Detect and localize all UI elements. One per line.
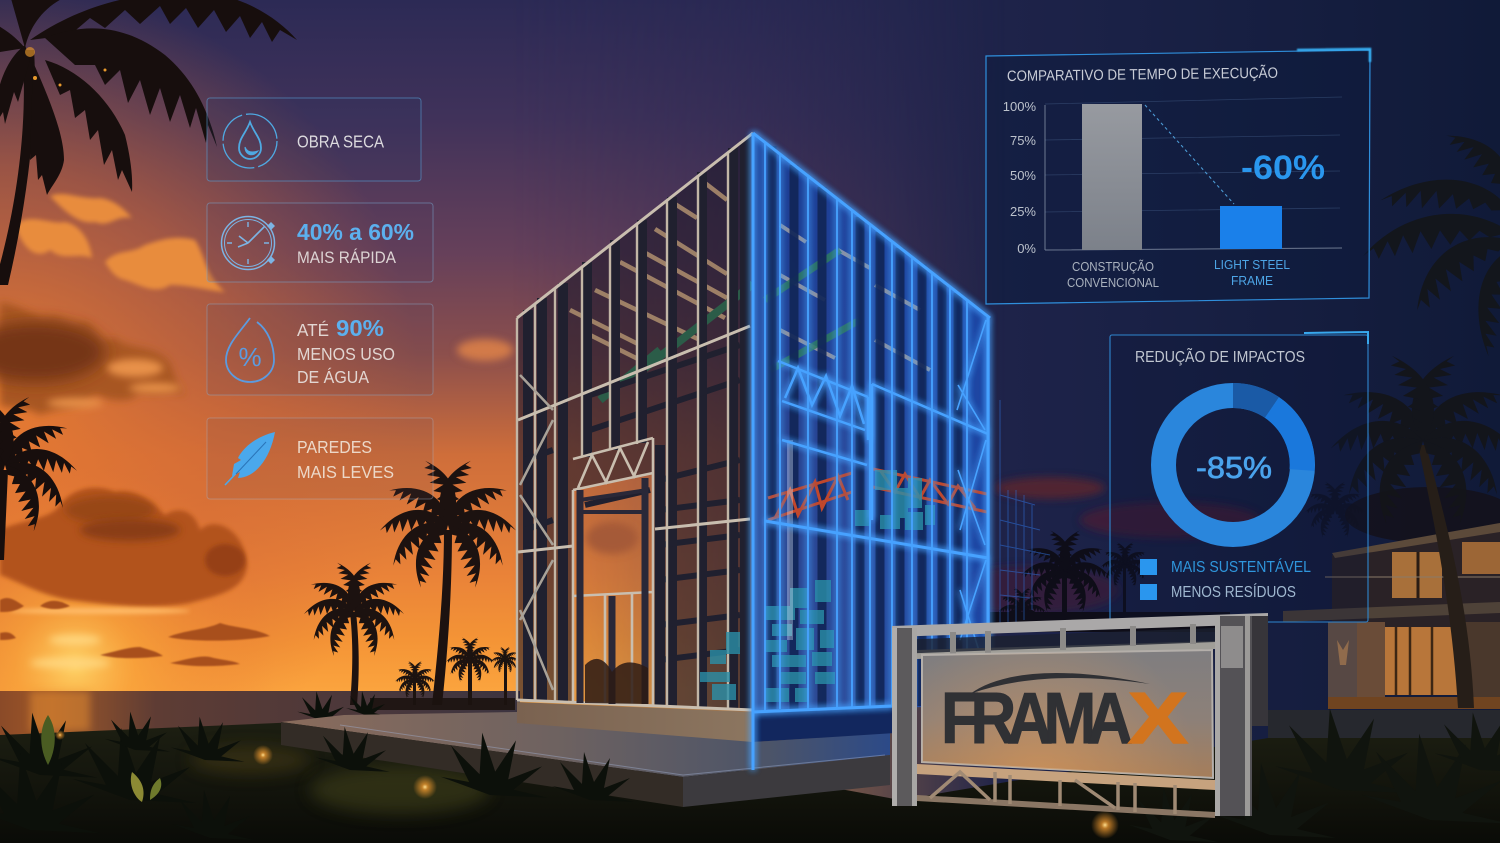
garden lamps xyxy=(55,730,1119,839)
palm tree: right edge xyxy=(1357,118,1500,358)
palm highlights xyxy=(25,47,106,86)
icon: percent drop xyxy=(226,318,274,382)
text xyxy=(297,437,394,482)
concrete slab xyxy=(281,712,890,807)
sun glow xyxy=(30,635,110,668)
text: MAIS RÁPIDA xyxy=(297,248,397,267)
sign plate xyxy=(922,650,1213,778)
palm tree: centre short xyxy=(304,559,404,705)
title: COMPARATIVO DE TEMPO DE EXECUÇÃO xyxy=(1007,65,1278,85)
legend: MAIS SUSTENTÁVEL xyxy=(1171,559,1311,576)
small horizon clouds xyxy=(0,598,270,666)
large red cloud xyxy=(0,488,247,606)
text: MAIS LEVES xyxy=(297,462,394,482)
panel: faster construction xyxy=(207,203,433,282)
text: DE ÁGUA xyxy=(297,367,369,387)
arrow: reduction xyxy=(1145,105,1234,204)
label: conventional xyxy=(1067,259,1159,290)
label: conventional: CONVENCIONAL xyxy=(1067,275,1159,290)
sunset clouds xyxy=(0,194,1260,668)
value: -60%: -60% xyxy=(1241,149,1325,187)
icon: water drop xyxy=(223,114,277,168)
label: light steel frame: LIGHT STEEL xyxy=(1214,257,1290,272)
logo text: FRAMA xyxy=(941,679,1133,759)
house on the right xyxy=(1268,487,1500,738)
value: -85%: -85% xyxy=(1196,450,1272,485)
palm tree: centre tall xyxy=(380,455,516,705)
palm tree: left edge xyxy=(0,391,77,560)
small palms on the shore xyxy=(370,635,519,710)
bar chart: 25% xyxy=(1010,204,1036,219)
sea xyxy=(0,691,520,741)
text xyxy=(297,315,395,387)
left face: real steel frame xyxy=(517,133,753,710)
logo swoosh xyxy=(970,673,1150,694)
text: 40% a 60% xyxy=(297,219,414,245)
steel frame building xyxy=(517,133,990,770)
bar chart: 0% xyxy=(1017,241,1036,256)
bar: conventional xyxy=(1082,104,1142,250)
label: conventional: CONSTRUÇÃO xyxy=(1072,259,1154,274)
neon lines of the frame xyxy=(753,133,990,770)
text xyxy=(297,219,414,267)
label: light steel frame xyxy=(1214,257,1290,288)
legend: MENOS RESÍDUOS xyxy=(1171,584,1296,601)
panel: lighter walls xyxy=(207,418,433,499)
text: PAREDES xyxy=(297,437,372,457)
bar chart xyxy=(1003,97,1342,290)
title: REDUÇÃO DE IMPACTOS xyxy=(1135,346,1305,366)
palms right of the building xyxy=(990,479,1365,633)
upper orange cloud patches xyxy=(15,194,225,292)
panel: impact reduction xyxy=(1110,332,1368,622)
evening clouds on the right xyxy=(457,339,1260,614)
icon: percent drop: % xyxy=(238,342,262,372)
framax sign xyxy=(892,613,1268,818)
icon: clock xyxy=(222,216,275,270)
base of the building xyxy=(517,702,895,742)
logo text: X xyxy=(1128,679,1188,759)
icon: feather xyxy=(225,432,275,485)
donut chart xyxy=(1164,396,1302,534)
text: MENOS USO xyxy=(297,344,395,364)
palm tree: right big xyxy=(1331,349,1500,708)
bar chart: 50% xyxy=(1010,168,1036,183)
bar: light steel frame xyxy=(1220,206,1282,249)
bar chart: 100% xyxy=(1003,99,1036,114)
text: ATÉ xyxy=(297,320,329,340)
bar chart: 75% xyxy=(1010,133,1036,148)
text: 90% xyxy=(336,315,384,341)
panel: execution time comparison xyxy=(986,49,1370,304)
right face: holographic blue frame xyxy=(700,133,990,770)
label: light steel frame: FRAME xyxy=(1231,273,1273,288)
sign frame xyxy=(892,613,1268,818)
panel: obra seca xyxy=(207,98,421,181)
panel: less water xyxy=(207,304,433,395)
legend xyxy=(1140,559,1311,601)
teal structural blocks xyxy=(700,470,935,702)
door opening with truss header xyxy=(573,438,653,705)
large brown cloud xyxy=(0,302,185,415)
palm tree: top left xyxy=(0,0,297,285)
text: OBRA SECA xyxy=(297,132,384,152)
ground and vegetation xyxy=(0,691,1500,843)
red truss xyxy=(768,469,987,520)
blueprint grid extension xyxy=(1000,400,1050,625)
